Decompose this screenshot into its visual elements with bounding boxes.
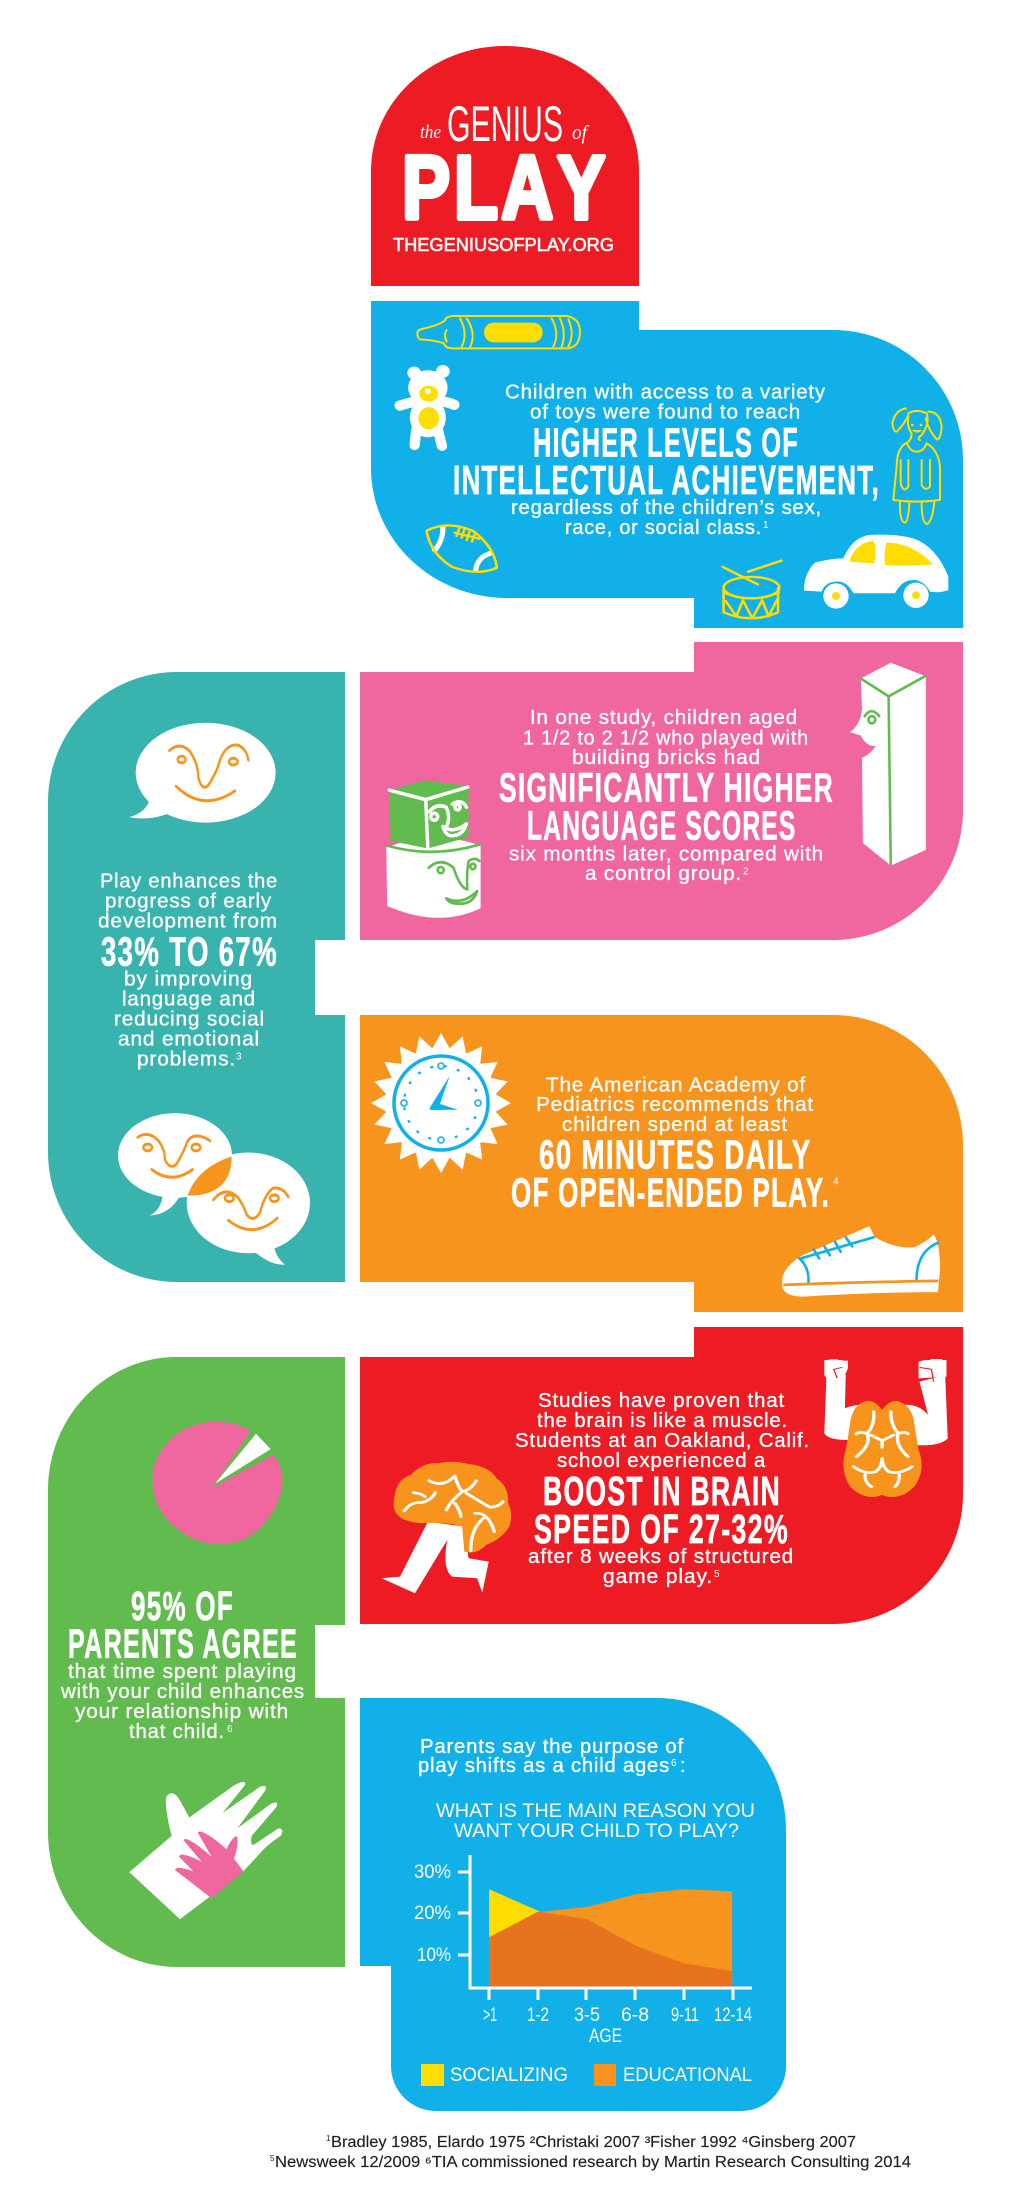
logo word: GENIUS: GENIUS [447,96,563,152]
heading: chart question [436,1801,755,1842]
chart: area chart by age [414,1855,752,2047]
legend: SOCIALIZING [450,2065,568,2086]
text: toys statistic: regardless of the children’s sex, [511,497,822,519]
text: daily play statistic: 60 MINUTES DAILY [539,1132,812,1178]
logo url: THEGENIUSOFPLAY.ORG [393,235,614,255]
text: brain statistic [515,1390,810,1588]
text: daily play statistic: Pediatrics recommends that [536,1094,814,1116]
text: development statistic: progress of early [105,890,272,912]
text: language statistic: 1 1/2 to 2 1/2 who played with [523,728,809,750]
text: brain statistic: Students at an Oakland, Calif. [515,1430,810,1452]
panel: toys and achievement [371,301,963,628]
panel: brain speed [360,1327,963,1624]
text: parents statistic: that time spent playing [68,1661,297,1683]
text: daily play statistic: OF OPEN-ENDED PLAY. [511,1170,830,1216]
text: language statistic [499,707,834,885]
text: brain statistic: school experienced a [557,1450,766,1472]
footnotes: Newsweek 12/2009 ⁶TIA commissioned research by Martin Research Consulting 2014 [275,2154,911,2171]
chart: area chart by age: 30% [414,1862,451,1883]
legend: EDUCATIONAL [623,2065,752,2086]
text: toys statistic: of toys were found to reach [530,402,801,424]
footnotes: Bradley 1985, Elardo 1975 ²Christaki 2007 ³Fisher 1992 ⁴Ginsberg 2007 [331,2134,856,2151]
text: daily play statistic: 4 [833,1176,839,1188]
text: brain statistic: Studies have proven that [538,1390,785,1412]
legend [421,2064,752,2086]
text: development statistic: language and [122,988,256,1010]
panel: building bricks [360,642,963,940]
text: chart intro: play shifts as a child ages [418,1755,670,1777]
text: toys statistic: HIGHER LEVELS OF [533,420,799,466]
footnotes: 1 [326,2134,331,2143]
text: brain statistic: game play. [603,1566,713,1588]
panel: daily play [360,1015,963,1312]
text: language statistic: In one study, children aged [530,707,798,729]
icon: smiling speech bubble [129,723,276,823]
text: brain statistic: the brain is like a muscle. [537,1410,788,1432]
footnotes [270,2134,911,2171]
logo word: of: of [572,122,589,144]
text: toys statistic: Children with access to a variety [505,382,826,404]
text: parents statistic: 95% OF [131,1583,234,1629]
heading: chart question: WANT YOUR CHILD TO PLAY? [454,1821,739,1842]
text: development statistic: 33% TO 67% [101,928,278,974]
text: parents statistic: that child. [129,1721,225,1743]
chart: area chart by age: 9-11 [671,2005,699,2026]
text: parents statistic: 6 [227,1724,233,1735]
text: language statistic: 2 [743,866,749,878]
text: daily play statistic [511,1074,839,1216]
icon: crayon [417,316,580,348]
heading: chart question: WHAT IS THE MAIN REASON YOU [436,1801,755,1822]
text: chart intro: 6 [671,1758,677,1769]
footnotes: 5 [270,2154,275,2163]
text: development statistic: by improving [124,968,253,990]
icon: adult and child hands [129,1782,282,1919]
text: chart intro: : [680,1755,686,1777]
chart: area chart by age: 12-14 [714,2005,752,2026]
icon: car [804,535,948,609]
panel: purpose of play chart [360,1698,786,2111]
chart: area chart by age: 1-2 [527,2005,549,2026]
text: brain statistic: after 8 weeks of structured [528,1546,794,1568]
chart: area chart by age: >1 [483,2005,497,2026]
icon: pie chart 95 percent [153,1422,283,1544]
icon: drum [723,561,781,618]
chart: area chart by age: 20% [414,1903,451,1924]
text: development statistic: reducing social [114,1008,265,1030]
text: parents statistic: with your child enhances [60,1681,305,1703]
text: language statistic: building bricks had [572,747,761,769]
logo word: the: the [420,122,441,143]
panel: logo [371,46,639,286]
text: chart intro [418,1736,686,1777]
logo word: PLAY: PLAY [402,138,605,238]
text: parents statistic [60,1583,305,1743]
text: development statistic: Play enhances the [100,870,278,892]
text: toys statistic [453,382,880,539]
panel: parents agree [48,1357,345,1967]
text: language statistic: six months later, compared with [509,844,824,866]
text: development statistic: and emotional [118,1028,260,1050]
text: brain statistic: SPEED OF 27-32% [534,1506,789,1552]
chart: area chart by age: 10% [417,1945,451,1966]
text: toys statistic: race, or social class. [565,517,762,539]
text: language statistic: a control group. [585,863,742,885]
text: brain statistic: BOOST IN BRAIN [543,1468,781,1514]
icon: football [427,525,497,572]
icon: overlapping speech bubbles [118,1113,310,1265]
text: language statistic: LANGUAGE SCORES [527,802,796,848]
icon: girl [892,408,942,524]
text: chart intro: Parents say the purpose of [420,1736,684,1758]
text: daily play statistic: The American Academy of [546,1074,806,1096]
text: parents statistic: your relationship with [75,1701,289,1723]
icon: teddy bear [400,365,454,446]
chart: area chart by age: 3-5 [574,2005,600,2026]
icon: flexing brain [824,1359,948,1497]
chart: area chart by age: AGE [589,2026,622,2047]
icon: sun clock [371,1033,511,1173]
text: toys statistic: 1 [763,520,769,531]
panel: early development [48,672,345,1282]
text: development statistic: problems. [137,1048,236,1070]
text: development statistic: development from [98,910,278,932]
text: language statistic: SIGNIFICANTLY HIGHER [499,764,834,810]
text: parents statistic: PARENTS AGREE [68,1620,298,1666]
chart: area chart by age: 6-8 [621,2005,649,2026]
text: brain statistic: 5 [714,1569,720,1580]
icon: running brain [382,1462,511,1593]
text: development statistic: 3 [236,1052,242,1062]
icon: stacked blocks with faces [386,780,481,918]
text: daily play statistic: children spend at least [562,1114,788,1136]
icon: sneaker [782,1226,940,1297]
text: development statistic [98,870,278,1070]
icon: tall block with face [850,663,926,866]
